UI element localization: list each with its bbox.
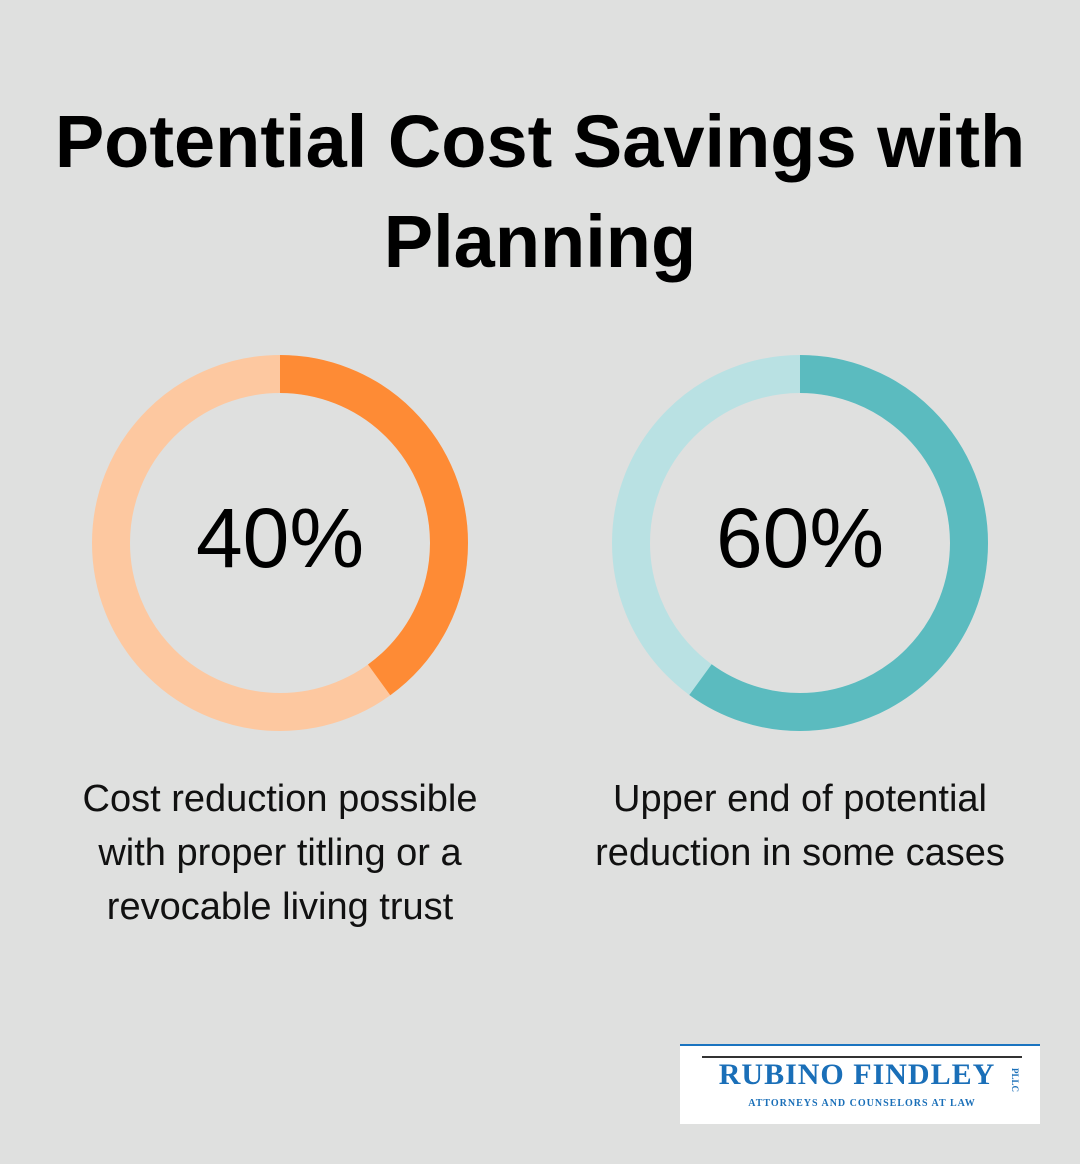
title: Planning <box>384 200 696 283</box>
caption left <box>82 778 478 928</box>
caption right: Upper end of potential <box>613 778 987 820</box>
logo: ATTORNEYS AND COUNSELORS AT LAW <box>748 1098 976 1109</box>
logo: PLLC <box>1010 1068 1020 1092</box>
title: Potential Cost Savings with <box>55 100 1025 183</box>
caption left: with proper titling or a <box>98 832 462 874</box>
logo: RUBINO FINDLEY <box>719 1058 995 1091</box>
value 40%: 40% <box>196 491 364 585</box>
logo <box>680 1044 1040 1124</box>
caption left: revocable living trust <box>107 886 453 928</box>
caption left: Cost reduction possible <box>82 778 478 820</box>
ring: 40 percent <box>111 374 449 712</box>
caption right: reduction in some cases <box>595 832 1005 874</box>
value 60%: 60% <box>716 491 884 585</box>
caption right <box>595 778 1005 874</box>
ring: 60 percent <box>631 374 969 712</box>
title <box>55 100 1025 283</box>
